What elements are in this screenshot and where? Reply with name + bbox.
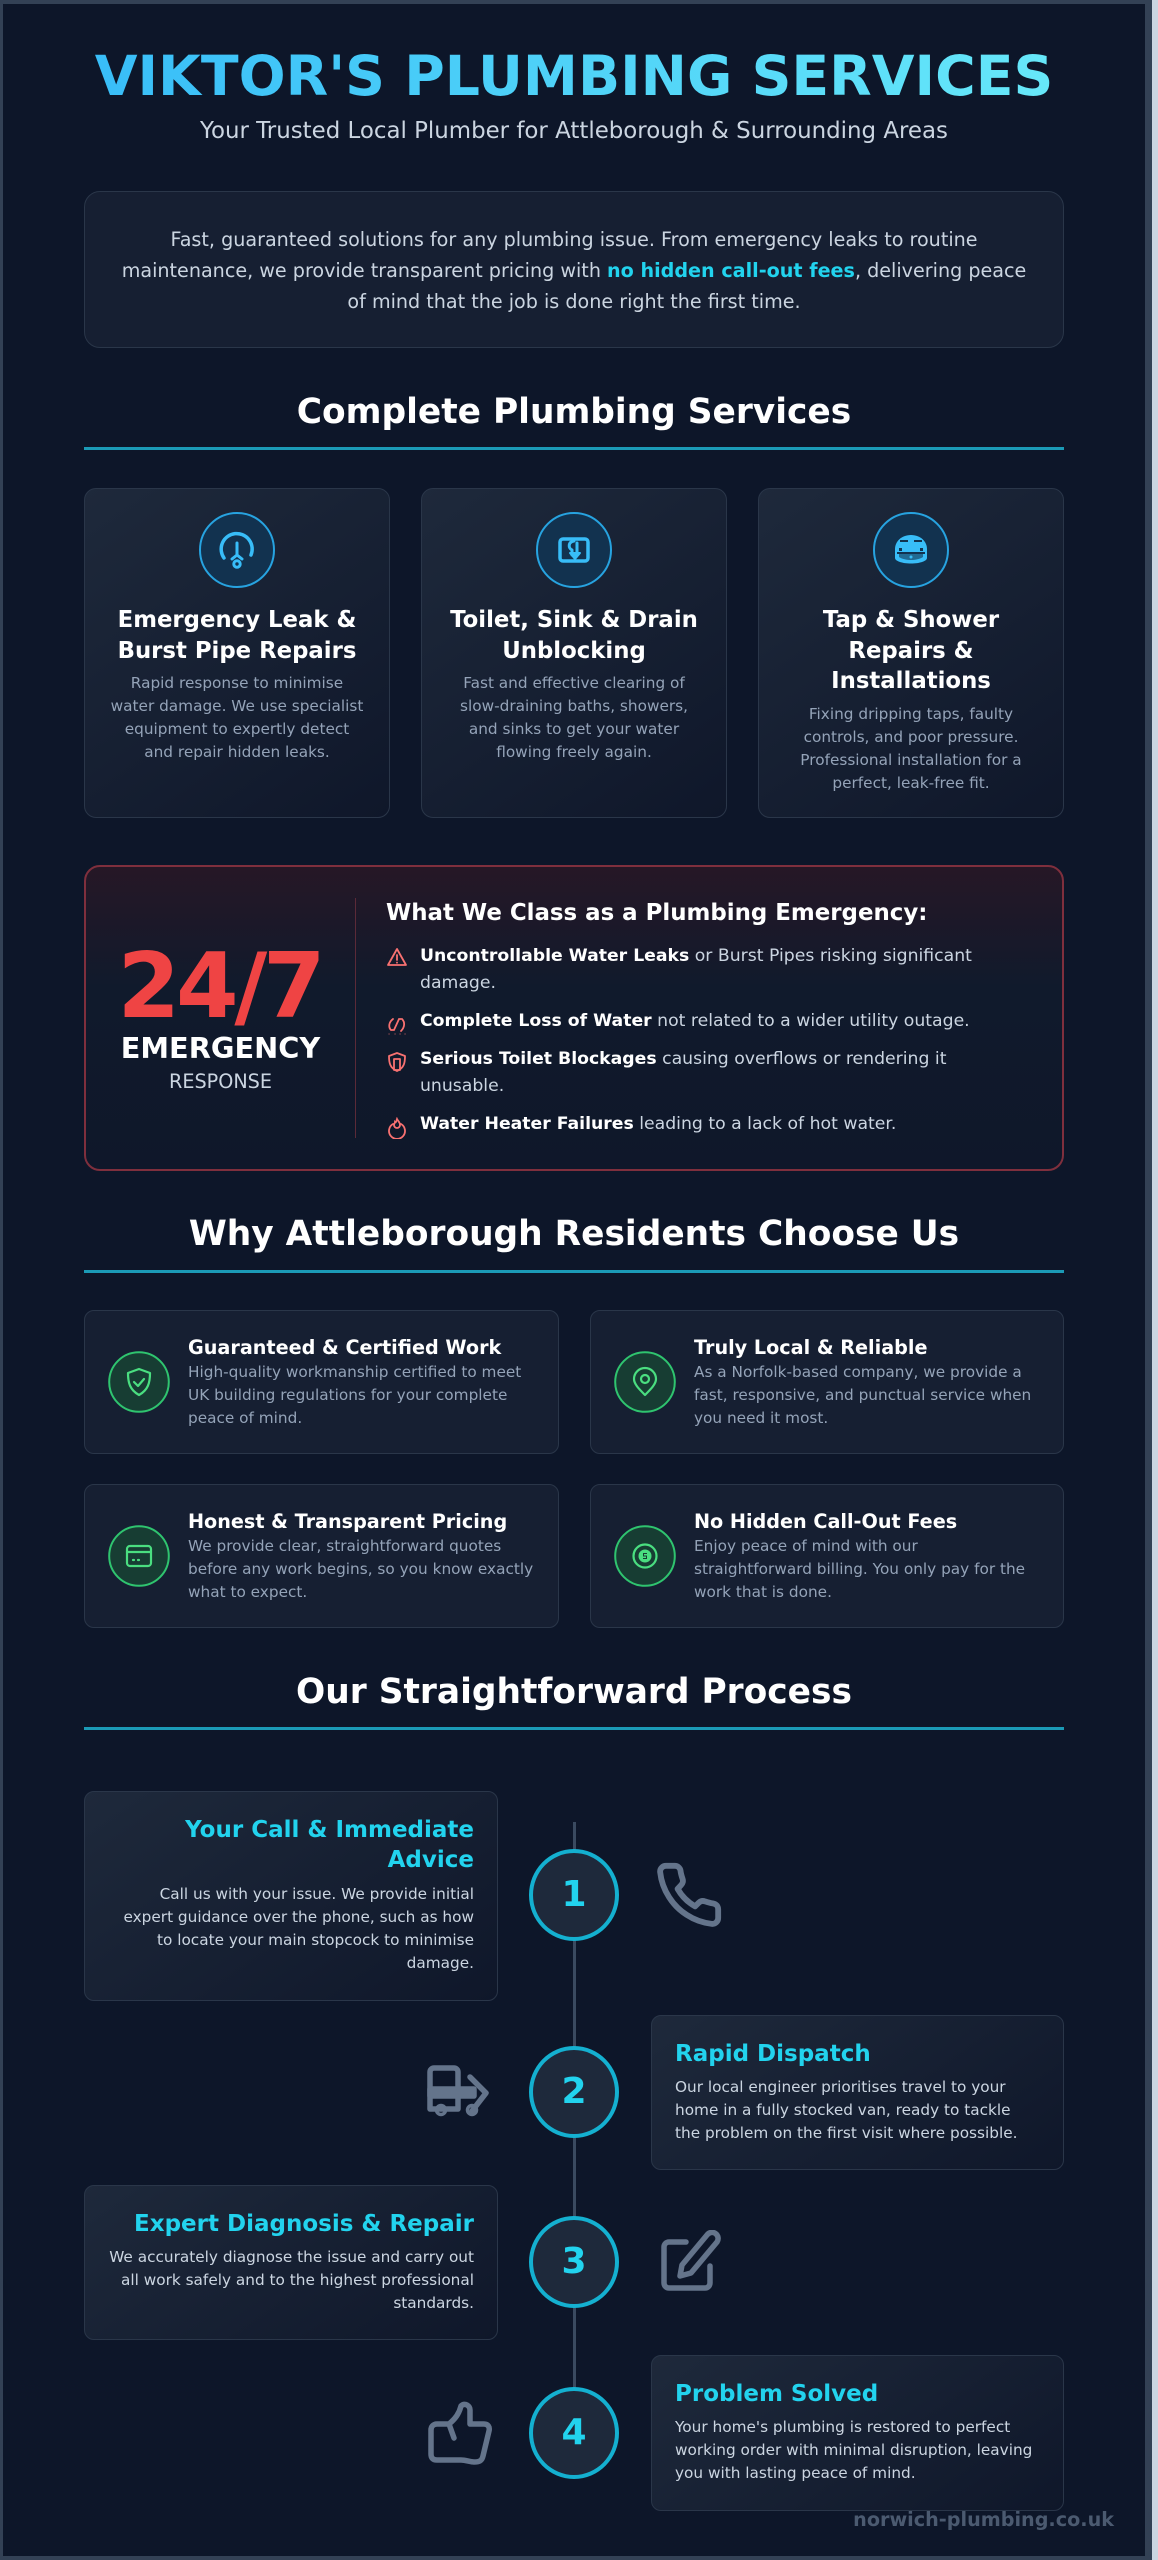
step description: damage. — [407, 1954, 474, 1972]
step title: Your Call & Immediate — [185, 1817, 474, 1843]
step number 2 — [529, 2046, 619, 2138]
service description: Fixing dripping taps, faulty — [809, 705, 1013, 723]
step description: all work safely and to the highest professional — [121, 2271, 474, 2289]
RESPONSE label: RESPONSE — [169, 1070, 272, 1093]
service title: Installations — [831, 668, 991, 694]
heading: process: Our Straightforward Process — [296, 1672, 852, 1712]
description: We provide clear, straightforward quotes — [188, 1537, 501, 1555]
step description: expert guidance over the phone, such as how — [123, 1908, 474, 1926]
step number 2: 2 — [561, 2071, 587, 2112]
step description: We accurately diagnose the issue and carry out — [109, 2248, 474, 2266]
icon: drain — [536, 512, 612, 588]
service description: slow-draining baths, showers, — [460, 697, 688, 715]
title: Truly Local & Reliable — [694, 1336, 927, 1359]
description: work that is done. — [694, 1583, 832, 1601]
description: Enjoy peace of mind with our — [694, 1537, 918, 1555]
step description: Your home's plumbing is restored to perfect — [675, 2418, 1010, 2436]
icon: pencil — [661, 2230, 721, 2291]
step description — [675, 2078, 1017, 2142]
emergency item 3: Serious Toilet Blockages causing overflows or rendering it — [420, 1049, 946, 1069]
step number 4: 4 — [561, 2412, 587, 2453]
description: UK building regulations for your complete — [188, 1386, 507, 1404]
step number 3: 3 — [561, 2241, 587, 2282]
service description — [460, 674, 688, 761]
panel: step 2 — [651, 2015, 1064, 2170]
description: fast, responsive, and punctual service when — [694, 1386, 1031, 1404]
title: Guaranteed & Certified Work — [188, 1336, 501, 1359]
description — [188, 1363, 521, 1427]
service title: Toilet, Sink & Drain — [450, 607, 698, 633]
step number 1 — [529, 1849, 619, 1941]
step title — [185, 1817, 474, 1873]
heading: why: Why Attleborough Residents Choose Us — [189, 1214, 959, 1254]
service title — [822, 607, 1000, 694]
icon: tap — [873, 512, 949, 588]
service title: Repairs & — [848, 638, 974, 664]
service description — [800, 705, 1022, 792]
step title: Advice — [388, 1847, 474, 1873]
service description: equipment to expertly detect — [125, 720, 349, 738]
icon: card — [108, 1525, 170, 1587]
description — [694, 1537, 1025, 1601]
description: peace of mind. — [188, 1409, 302, 1427]
panel: no hidden fees — [590, 1484, 1064, 1628]
timeline line — [572, 1822, 576, 2432]
panel: service 1 — [84, 488, 390, 818]
step description: home in a fully stocked van, ready to tackle — [675, 2101, 1011, 2119]
divider — [355, 898, 356, 1138]
panel: service 3 — [758, 488, 1064, 818]
icon: broken pipe — [388, 1018, 406, 1034]
icon: heater flame — [388, 1117, 406, 1139]
panel: intro: maintenance, we provide transparent pricing with no hidden call-out fees, delivering peace — [122, 259, 1026, 282]
step description: the problem on the first visit where possible. — [675, 2124, 1017, 2142]
emergency item 3 — [420, 1049, 946, 1096]
step number 1: 1 — [561, 1874, 587, 1915]
panel: service 2 — [421, 488, 727, 818]
emergency item 1: damage. — [420, 973, 496, 993]
step description: Our local engineer prioritises travel to your — [675, 2078, 1006, 2096]
icon: van — [427, 2065, 489, 2116]
heading: services: Complete Plumbing Services — [297, 392, 851, 432]
title: Honest & Transparent Pricing — [188, 1510, 507, 1533]
service title — [118, 607, 356, 664]
emergency heading: What We Class as a Plumbing Emergency: — [386, 900, 927, 926]
description — [694, 1363, 1031, 1427]
step title: Problem Solved — [675, 2381, 878, 2407]
step description: to locate your main stopcock to minimise — [157, 1931, 474, 1949]
title: VIKTOR'S PLUMBING SERVICES — [95, 45, 1053, 109]
description: you need it most. — [694, 1409, 828, 1427]
panel: intro: Fast, guaranteed solutions for any plumbing issue. From emergency leaks to routine — [170, 228, 978, 251]
panel: intro — [84, 191, 1064, 348]
panel: local — [590, 1310, 1064, 1454]
description — [188, 1537, 533, 1601]
icon: thumbs up — [428, 2402, 492, 2465]
emergency item 1: Uncontrollable Water Leaks or Burst Pipes risking significant — [420, 946, 972, 966]
step description: working order with minimal disruption, leaving — [675, 2441, 1032, 2459]
panel: pricing — [84, 1484, 559, 1628]
step description: you with lasting peace of mind. — [675, 2464, 916, 2482]
panel: emergency — [84, 865, 1064, 1171]
service description: controls, and poor pressure. — [804, 728, 1018, 746]
panel: intro: of mind that the job is done right the first time. — [347, 290, 801, 313]
description: straightforward billing. You only pay for the — [694, 1560, 1025, 1578]
service title — [450, 607, 698, 664]
service description: water damage. We use specialist — [111, 697, 363, 715]
icon: gauge — [199, 512, 275, 588]
service description — [111, 674, 363, 761]
service description: perfect, leak-free fit. — [832, 774, 990, 792]
icon: phone — [657, 1862, 722, 1927]
description: High-quality workmanship certified to meet — [188, 1363, 521, 1381]
description: before any work begins, so you know exactly — [188, 1560, 533, 1578]
big 24/7: 24/7 — [118, 934, 321, 1039]
emergency item 2: Complete Loss of Water not related to a wider utility outage. — [420, 1011, 970, 1031]
emergency item 1 — [420, 946, 972, 993]
EMERGENCY label: EMERGENCY — [121, 1031, 320, 1065]
subtitle: Your Trusted Local Plumber for Attleborough & Surrounding Areas — [200, 118, 948, 144]
step description: Call us with your issue. We provide initial — [160, 1885, 474, 1903]
service description: and repair hidden leaks. — [144, 743, 330, 761]
step description — [109, 2248, 474, 2312]
description: what to expect. — [188, 1583, 307, 1601]
title: No Hidden Call-Out Fees — [694, 1510, 957, 1533]
step description — [123, 1885, 474, 1972]
description: As a Norfolk-based company, we provide a — [694, 1363, 1022, 1381]
panel: step 1 — [84, 1791, 498, 2001]
service description: Professional installation for a — [800, 751, 1022, 769]
step number 3 — [529, 2216, 619, 2308]
service title: Unblocking — [502, 638, 646, 664]
panel: step 4 — [651, 2355, 1064, 2511]
service description: flowing freely again. — [496, 743, 652, 761]
panel: guaranteed — [84, 1310, 559, 1454]
icon: shield check — [108, 1351, 170, 1413]
emergency item 4: Water Heater Failures leading to a lack of hot water. — [420, 1114, 896, 1134]
service description: and sinks to get your water — [469, 720, 679, 738]
icon: toilet shield — [388, 1052, 406, 1072]
step number 4 — [529, 2387, 619, 2479]
service description: Rapid response to minimise — [131, 674, 343, 692]
footer url: norwich-plumbing.co.uk — [853, 2508, 1114, 2531]
service title: Burst Pipe Repairs — [118, 638, 356, 664]
service title: Tap & Shower — [823, 607, 999, 633]
step title: Expert Diagnosis & Repair — [134, 2211, 474, 2237]
step description: standards. — [393, 2294, 474, 2312]
step title: Rapid Dispatch — [675, 2041, 871, 2067]
panel: step 3 — [84, 2185, 498, 2340]
icon: map pin — [614, 1351, 676, 1413]
icon: warning triangle — [387, 948, 407, 966]
service title: Emergency Leak & — [118, 607, 356, 633]
step description — [675, 2418, 1032, 2482]
service description: Fast and effective clearing of — [463, 674, 685, 692]
icon: coin — [614, 1525, 676, 1587]
emergency item 3: unusable. — [420, 1076, 504, 1096]
